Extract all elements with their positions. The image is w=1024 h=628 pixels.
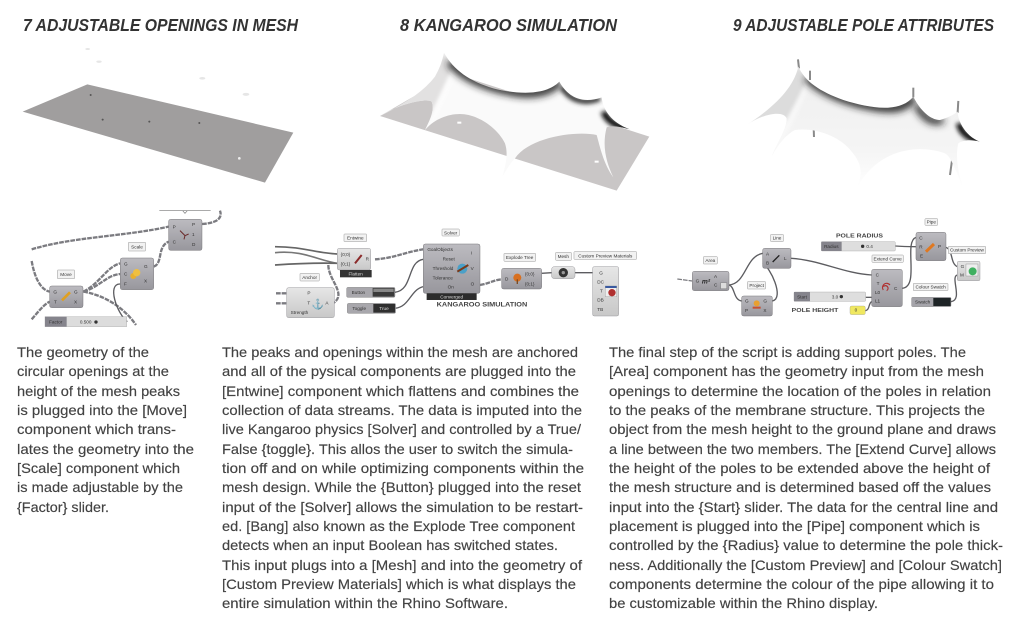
diagram: pole attribute components (677, 219, 986, 316)
text block: poles description: openings to determine the location of the poles in relation (609, 383, 991, 399)
component: scale: Scale (131, 244, 143, 249)
component: explode tree: D (505, 277, 509, 282)
text block: simulation description: mesh design. While the {Button} plugged into the reset (222, 479, 581, 495)
toggle: button (347, 287, 395, 297)
text block: simulation description: input of the [Solver] allows the simulation to be restart- (222, 499, 583, 515)
render: flat mesh with openings (23, 48, 293, 183)
component: anchor: Strength (291, 310, 309, 315)
component: anchor: Anchor (302, 275, 317, 280)
slider: factor: 0.500 (80, 320, 92, 325)
title: 7 adjustable openings in mesh: 7 ADJUSTABLE OPENINGS IN MESH (23, 15, 298, 35)
component: solver: O (471, 281, 475, 286)
component: custom preview materials (574, 252, 637, 316)
component: pipe: C (919, 235, 923, 240)
text block: openings description: height of the mesh peaks (17, 383, 180, 399)
component: area: A (714, 274, 718, 279)
component: explode tree (502, 253, 542, 289)
component: anchor: T (307, 300, 310, 305)
diagram: kangaroo solver components (275, 229, 637, 318)
component: top: P (173, 224, 176, 229)
text block: poles description: components determine the colour of the pipe allowing it to (609, 576, 994, 592)
component: extend curve: C (894, 286, 898, 291)
component: solver: Reset (443, 257, 456, 262)
component: project: G (763, 299, 767, 304)
component: custom preview materials: TB (597, 307, 603, 312)
label: pole radius: POLE RADIUS (836, 233, 883, 239)
text block: simulation description: and all of the pysical components are plugged into the (222, 363, 576, 379)
component: mesh (552, 252, 575, 279)
component: area: C (714, 283, 718, 288)
toggle: true: Toggle (352, 306, 366, 311)
component: top: D (192, 242, 196, 247)
component: solver: On (448, 285, 454, 290)
component: line: A (766, 251, 770, 256)
component: area: G (696, 279, 700, 284)
text block: simulation description: This input plugs into a [Mesh] and into the geometry of (222, 557, 582, 573)
component: explode tree: {0;1} (525, 281, 535, 286)
toggle: true (347, 303, 396, 313)
label: kangaroo simulation: KANGAROO SIMULATION (437, 302, 528, 309)
component: project: Project (749, 283, 765, 288)
component: project: G (745, 299, 749, 304)
component: solver: I (471, 250, 472, 255)
text block: poles description: placement is plugged into the [Pipe] component which is (609, 518, 980, 534)
component: scale: F (124, 281, 127, 286)
component: line (763, 234, 791, 268)
text block: openings description: is made adjustable by the (17, 479, 183, 495)
component: custom preview materials: T (600, 289, 603, 294)
component: project: X (763, 308, 767, 313)
component: scale: C (124, 271, 128, 276)
component: scale: X (144, 279, 148, 284)
text block: poles description: ness. Additionally the [Custom Preview] and [Colour Swatch] (609, 557, 1002, 573)
component: solver: GoalObjects (427, 247, 454, 252)
component: top: C (173, 239, 177, 244)
text block: openings description: is plugged into the [Move] (17, 402, 187, 418)
component: move: X (74, 299, 78, 304)
text block: simulation description: [Entwine] component which flattens and combines the (222, 383, 579, 399)
text block: poles description: object from the mesh height to the ground plane and draws (609, 421, 996, 437)
component: custom preview materials: DC (597, 279, 605, 284)
component: extend curve: Extend Curve (874, 256, 902, 261)
component: move: G (53, 290, 57, 295)
toggle: button: Button (352, 290, 366, 295)
component: line: B (766, 261, 769, 266)
slider: radius: Radius (824, 244, 839, 249)
component: top (169, 219, 202, 250)
component: scale: G (144, 264, 148, 269)
text block: poles description (609, 344, 1003, 611)
component: project: P (745, 308, 748, 313)
component: scale: G (124, 262, 128, 267)
component: line: L (784, 256, 787, 261)
component: area (692, 257, 729, 291)
component: area: Area (705, 258, 716, 263)
component: extend curve: T (877, 281, 880, 286)
component: solver: V (471, 266, 475, 271)
text block: simulation description: tion off and on while optimizing components within the (222, 460, 584, 476)
swatch: colour swatch (912, 283, 951, 307)
component: extend curve: C (876, 272, 880, 277)
title: 8 kangaroo simulation: 8 KANGAROO SIMULATION (400, 15, 617, 35)
component: pipe: Pipe (927, 220, 936, 225)
component: move: Move (60, 272, 72, 277)
component: custom preview materials: DB (597, 298, 604, 303)
text block: openings description: circular openings at the (17, 363, 169, 379)
text block: simulation description: The peaks and openings within the mesh are anchored (222, 344, 578, 360)
text block: openings description (17, 344, 194, 515)
label: pole height: POLE HEIGHT (792, 308, 839, 314)
component: entwine: {0;0} (341, 252, 351, 257)
text block: poles description: The final step of the script is adding support poles. The (609, 344, 966, 360)
text block: simulation description: live Kangaroo physics [Solver] and controlled by a True/ (222, 421, 581, 437)
component: entwine: R (366, 257, 370, 262)
component: scale (120, 242, 154, 290)
text block: simulation description: detects when an input Boolean has switched states. (222, 537, 558, 553)
component: pipe: E (920, 253, 923, 258)
component: solver: Threshold (433, 266, 454, 271)
diagram: move and scale components (32, 211, 221, 327)
text block: simulation description: [Custom Preview Materials] which is what displays the (222, 576, 576, 592)
render: kangaroo membrane simulation (380, 53, 649, 191)
component: pipe (916, 219, 946, 261)
component: move: G (74, 290, 78, 295)
component: top: 1 (192, 232, 195, 237)
component: entwine (337, 234, 372, 277)
component: custom preview: Custom Preview (950, 248, 985, 253)
component: line: Line (773, 236, 782, 241)
slider: start: Start (797, 294, 808, 299)
component: top: P (192, 222, 195, 227)
component: mesh: Mesh (558, 254, 569, 259)
component: solver: Solver (444, 230, 458, 235)
component: explode tree: {0;0} (525, 272, 535, 277)
slider: start (794, 292, 866, 301)
text block: openings description: [Scale] component which (17, 460, 180, 476)
component: solver (423, 229, 480, 300)
component: custom preview: G (961, 264, 965, 269)
text block: openings description: lates the geometry into the (17, 441, 194, 457)
text block: poles description: input into the {Start} slider. The data for the central line and (609, 499, 998, 515)
swatch: colour swatch: Swatch (915, 300, 931, 305)
component: explode tree: Explode Tree (506, 255, 534, 260)
component: move (50, 270, 83, 308)
toggle: true: True (379, 306, 389, 311)
slider: radius (821, 242, 895, 251)
component: project (742, 282, 772, 316)
component: custom preview (948, 246, 986, 281)
tooltip: unnamed top component (159, 211, 211, 213)
text block: simulation description: ed. [Bang] also known as the Explode Tree component (222, 518, 575, 534)
component: anchor (287, 273, 334, 318)
text block: simulation description: entire simulation within the Rhino Software. (222, 595, 508, 611)
component: entwine: Flatten (349, 271, 363, 276)
slider: factor (45, 317, 127, 327)
title: 9 adjustable pole attributes: 9 ADJUSTABLE POLE ATTRIBUTES (733, 15, 994, 35)
component: anchor: P (307, 291, 310, 296)
text block: poles description: to the peaks of the membrane structure. This projects the (609, 402, 985, 418)
text block: openings description: {Factor} slider. (17, 499, 109, 515)
text block: poles description: the mesh structure and is determined based off the values (609, 479, 991, 495)
text block: poles description: the height of the poles to be extended above the height of (609, 460, 990, 476)
render: membrane with support poles (752, 59, 980, 176)
component: area: m² (702, 278, 711, 285)
component: custom preview: M (960, 273, 964, 278)
component: custom preview materials: Custom Preview Materials (578, 253, 633, 258)
slider: radius: 0.4 (866, 244, 873, 249)
component: pipe: P (938, 244, 941, 249)
text block: poles description: controlled by the {Radius} value to determine the pole thick- (609, 537, 1003, 553)
component: extend curve: L1 (875, 299, 881, 304)
text block: simulation description (222, 344, 584, 611)
component: custom preview materials: G (599, 270, 603, 275)
text block: openings description: component which trans- (17, 421, 176, 437)
panel: yellow value (850, 306, 865, 315)
component: extend curve (872, 255, 903, 307)
text block: poles description: [Area] component has the geometry input from the mesh (609, 363, 984, 379)
text block: poles description: be customizable within the Rhino display. (609, 595, 878, 611)
component: entwine: Entwine (347, 236, 364, 241)
slider: factor: Factor (49, 320, 63, 325)
text block: simulation description: collection of data streams. The data is imputed into the (222, 402, 582, 418)
swatch: colour swatch: Colour Swatch (915, 285, 946, 290)
text block: simulation description: False {toggle}. This allos the user to switch the simula- (222, 441, 573, 457)
panel: yellow value: 0 (855, 308, 858, 313)
component: solver: Converged (440, 294, 463, 299)
component: pipe: R (919, 244, 923, 249)
component: extend curve: L0 (875, 290, 881, 295)
text block: openings description: The geometry of the (17, 344, 149, 360)
component: entwine: {0;1} (341, 262, 351, 267)
slider: start: 3.0 (832, 294, 839, 299)
component: anchor: ⚓ (311, 298, 324, 311)
component: solver: Tolerance (433, 275, 453, 280)
text block: poles description: a line between the two members. The [Extend Curve] allows (609, 441, 996, 457)
component: anchor: A (325, 301, 329, 306)
component: move: T (54, 299, 57, 304)
